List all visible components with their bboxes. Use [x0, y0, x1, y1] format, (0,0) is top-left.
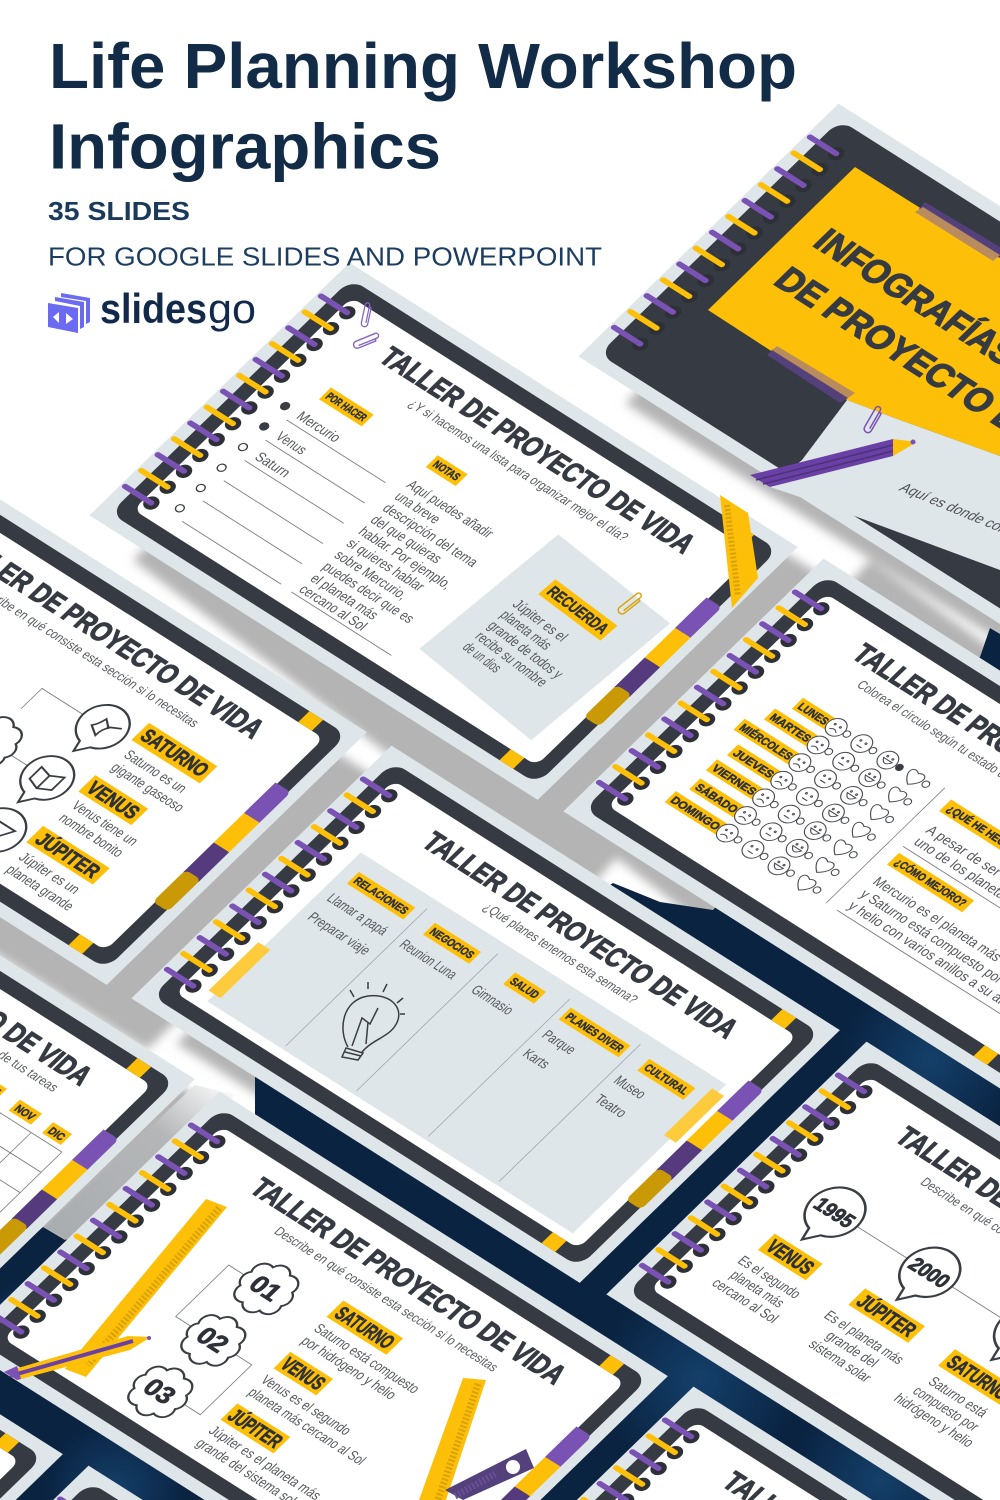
slide: to-do list — [89, 263, 798, 800]
numbered title: TALLER DE PROYECTO DE VIDA — [243, 1173, 573, 1390]
slide count: 35 SLIDES — [48, 196, 190, 226]
venus text: nombre bonito — [55, 811, 127, 861]
tag: venus: VENUS — [761, 1237, 818, 1279]
column: relaciones: RELACIONES — [350, 876, 411, 917]
venus text: Es el segundo — [734, 1254, 804, 1302]
cloud 02 — [169, 1305, 257, 1375]
cloud 03: 03 — [137, 1374, 182, 1410]
notes paragraph: cercano al Sol — [295, 582, 370, 634]
to-do labels: Saturn — [251, 450, 294, 481]
slide: partial left bottom — [0, 1170, 63, 1500]
notes paragraph: una breve — [391, 489, 444, 527]
calendar grid — [0, 1055, 62, 1274]
cover yellow panel — [708, 167, 1000, 456]
reminder text — [459, 597, 592, 704]
reminder text: grande de todos y — [483, 618, 567, 682]
saturno text: por hidrógeno y helio — [297, 1334, 400, 1403]
process connectors — [0, 688, 83, 817]
saturno text: compuesto por — [909, 1384, 982, 1435]
notes paragraph: si quieres hablar — [342, 536, 428, 595]
yellow paperclip — [617, 592, 644, 615]
tape left — [209, 942, 270, 998]
bottom ruler — [419, 1378, 486, 1500]
timeline line — [857, 1226, 1000, 1392]
bubble 1995: 1995 — [808, 1193, 860, 1232]
cloud 01: 01 — [243, 1271, 288, 1307]
column: relaciones — [304, 870, 415, 959]
column: negocios: NEGOCIOS — [426, 926, 477, 961]
column: cultural: CULTURAL — [641, 1062, 691, 1097]
reminder text: planeta más — [496, 608, 555, 653]
to-do title: TALLER DE PROYECTO DE VIDA — [372, 342, 702, 560]
cover light sheet — [770, 400, 1000, 570]
slidesgo logo icon — [48, 293, 90, 333]
cover tape top — [915, 202, 1000, 261]
tag: jupiter: JÚPITER — [223, 1404, 289, 1452]
column: relaciones: Llamar a papá — [323, 891, 391, 939]
tag: recuerda: RECUERDA — [542, 584, 612, 637]
main title — [49, 30, 797, 182]
saturno text: Saturno es un — [120, 748, 190, 796]
to-do labels: Mercurio — [293, 409, 344, 446]
bubble 2000: 2000 — [903, 1254, 955, 1292]
bubble 2010 — [972, 1298, 1000, 1376]
bubble 1995 — [783, 1178, 878, 1255]
yellow ruler — [720, 495, 758, 608]
notes paragraph: el planeta más — [306, 571, 382, 623]
purple paperclip vertical — [361, 302, 372, 327]
numbered connectors — [124, 1265, 305, 1415]
day tags — [661, 684, 836, 835]
saturno text: hidrógeno y helio — [890, 1391, 977, 1451]
jupiter text: planeta grande — [2, 862, 77, 914]
tape right — [664, 1088, 724, 1143]
center cloud — [0, 705, 34, 775]
slide: partial bottom — [0, 1466, 537, 1500]
numbered subtitle: Describe en qué consiste esta sección si lo necesitas — [271, 1224, 502, 1374]
slidesgo logo text: go — [208, 285, 256, 332]
day tags: SÁBADO — [692, 781, 741, 816]
day tags: VIERNES — [709, 763, 759, 798]
saturno text: Saturno está compuesto — [310, 1321, 423, 1397]
slide: numbered list — [0, 1092, 668, 1500]
day tags: DOMINGO — [667, 795, 723, 833]
mood grid — [712, 715, 936, 899]
tag: saturno: SATURNO — [329, 1303, 399, 1353]
cover tape bottom — [767, 346, 855, 403]
to-do lines — [181, 420, 497, 655]
to-do bullets — [174, 401, 291, 513]
column: negocios — [395, 918, 481, 983]
yellow pencil — [4, 1336, 151, 1380]
venus text: planeta más cercano al Sol — [244, 1385, 369, 1469]
venus text — [708, 1252, 806, 1327]
main title: Life Planning Workshop — [49, 30, 797, 102]
subtitle: FOR GOOGLE SLIDES AND POWERPOINT — [48, 242, 602, 272]
tag: por hacer — [319, 388, 374, 426]
jupiter text: grande del — [822, 1329, 881, 1371]
navy highlights — [0, 970, 1000, 1500]
bubble: book — [1, 748, 85, 816]
cloud 02: 02 — [190, 1322, 235, 1358]
bubble 2000 — [877, 1238, 973, 1316]
notes paragraph — [295, 478, 505, 651]
day tags: MARTES — [767, 712, 814, 745]
cover paperclip — [863, 406, 884, 434]
emotions dividers — [826, 788, 1000, 1044]
navy background — [0, 628, 1000, 1500]
cloud 03 — [116, 1357, 204, 1427]
slide: process with icons — [0, 448, 367, 985]
grey note card — [407, 526, 681, 747]
tag: jupiter — [220, 1403, 291, 1454]
saturno text: gigante gaseoso — [107, 760, 187, 815]
tag: saturno: SATURNO — [135, 726, 213, 781]
column: salud: SALUD — [507, 976, 541, 1001]
tag: saturno — [326, 1300, 403, 1355]
icon: light bulb — [342, 982, 405, 1060]
day tags: MIÉRCOLES — [736, 722, 796, 763]
long yellow ruler — [65, 1199, 227, 1377]
notes paragraph: del que quieras — [367, 513, 445, 567]
column: planes diver — [519, 1008, 631, 1096]
tag: venus — [273, 1352, 333, 1396]
jupiter text: Júpiter es un — [15, 850, 83, 897]
column: negocios: Reunion Luna — [395, 937, 460, 983]
to-do subtitle: ¿Y si hacemos una lista para organizar mejor el día? — [405, 396, 632, 544]
slide: cover — [578, 104, 1000, 641]
purple paperclip horizontal — [352, 333, 380, 349]
reminder text: Júpiter es el — [508, 597, 571, 645]
month tags: NOV — [11, 1103, 38, 1123]
slide: weekly plans — [131, 746, 840, 1283]
notes paragraph: puedes decir que es — [318, 560, 417, 627]
tag: venus: VENUS — [276, 1354, 330, 1394]
day tags: LUNES — [795, 701, 831, 728]
tag: por hacer: POR HACER — [322, 391, 369, 424]
reminder text: recibe su nombre — [471, 629, 551, 690]
bubble: bell — [56, 696, 141, 765]
saturno text — [890, 1368, 1000, 1451]
venus text: Venus es el segundo — [257, 1373, 354, 1439]
venus text: Venus tiene un — [68, 798, 141, 849]
notes paragraph: hablar. Por ejemplo, — [354, 525, 455, 593]
to-do labels — [251, 409, 344, 486]
column: relaciones: Preparar viaje — [304, 910, 374, 958]
slide: partial bottom right — [433, 1387, 1000, 1500]
tag: jupiter: JÚPITER — [851, 1290, 922, 1341]
column dividers — [286, 909, 640, 1181]
tag: notas: NOTAS — [430, 459, 463, 483]
tag: como mejoro: ¿CÓMO MEJORO? — [891, 856, 970, 909]
venus text: cercano al Sol — [708, 1276, 781, 1327]
tag: saturno — [131, 723, 217, 783]
notes paragraph: descripción del tema — [379, 501, 481, 570]
plans subtitle: ¿Qué planes tenemos esta semana? — [480, 900, 641, 1006]
venus text: planeta más — [726, 1268, 788, 1311]
grey shadow band — [45, 1085, 235, 1240]
month tags: DIC — [45, 1126, 67, 1143]
column: planes diver: PLANES DIVER — [562, 1011, 626, 1055]
column: salud: Gimnasio — [467, 983, 517, 1018]
day tags: JUEVES — [730, 748, 777, 781]
tag: venus: VENUS — [81, 778, 144, 823]
jupiter text — [796, 1308, 907, 1391]
slide: calendar — [0, 795, 195, 1332]
column: planes diver: Parque — [538, 1028, 579, 1058]
purple set square — [445, 1449, 534, 1500]
slide: timeline — [606, 1042, 1000, 1500]
column: cultural: Teatro — [591, 1092, 630, 1121]
notes paragraph: Aquí puedes añadir — [403, 478, 497, 542]
slidesgo logo text: slides — [100, 285, 207, 332]
month tags — [0, 1076, 74, 1145]
plans title: TALLER DE PROYECTO DE VIDA — [415, 827, 745, 1044]
saturno text: Saturno está — [924, 1374, 991, 1421]
tag: jupiter — [848, 1288, 926, 1343]
slide: emotions tracker — [563, 559, 1000, 1096]
column: cultural — [591, 1054, 695, 1138]
column: salud — [467, 963, 546, 1024]
to-do labels: Venus — [272, 429, 310, 458]
notes paragraph: sobre Mercurio, — [330, 548, 411, 603]
cloud 01 — [222, 1254, 310, 1324]
column: cultural: Museo — [610, 1073, 649, 1102]
column: planes diver: Karts — [519, 1046, 553, 1072]
plans grey panel — [207, 852, 726, 1233]
jupiter text: sistema solar — [804, 1337, 875, 1386]
main title: Infographics — [49, 110, 441, 182]
tag: jupiter: JÚPITER — [30, 828, 106, 882]
bubble: paper — [0, 800, 37, 868]
cover pencil — [750, 439, 917, 487]
jupiter text: Es el planeta más — [820, 1308, 907, 1368]
tag: venus — [757, 1234, 823, 1281]
reminder text: de un dios — [459, 640, 505, 676]
